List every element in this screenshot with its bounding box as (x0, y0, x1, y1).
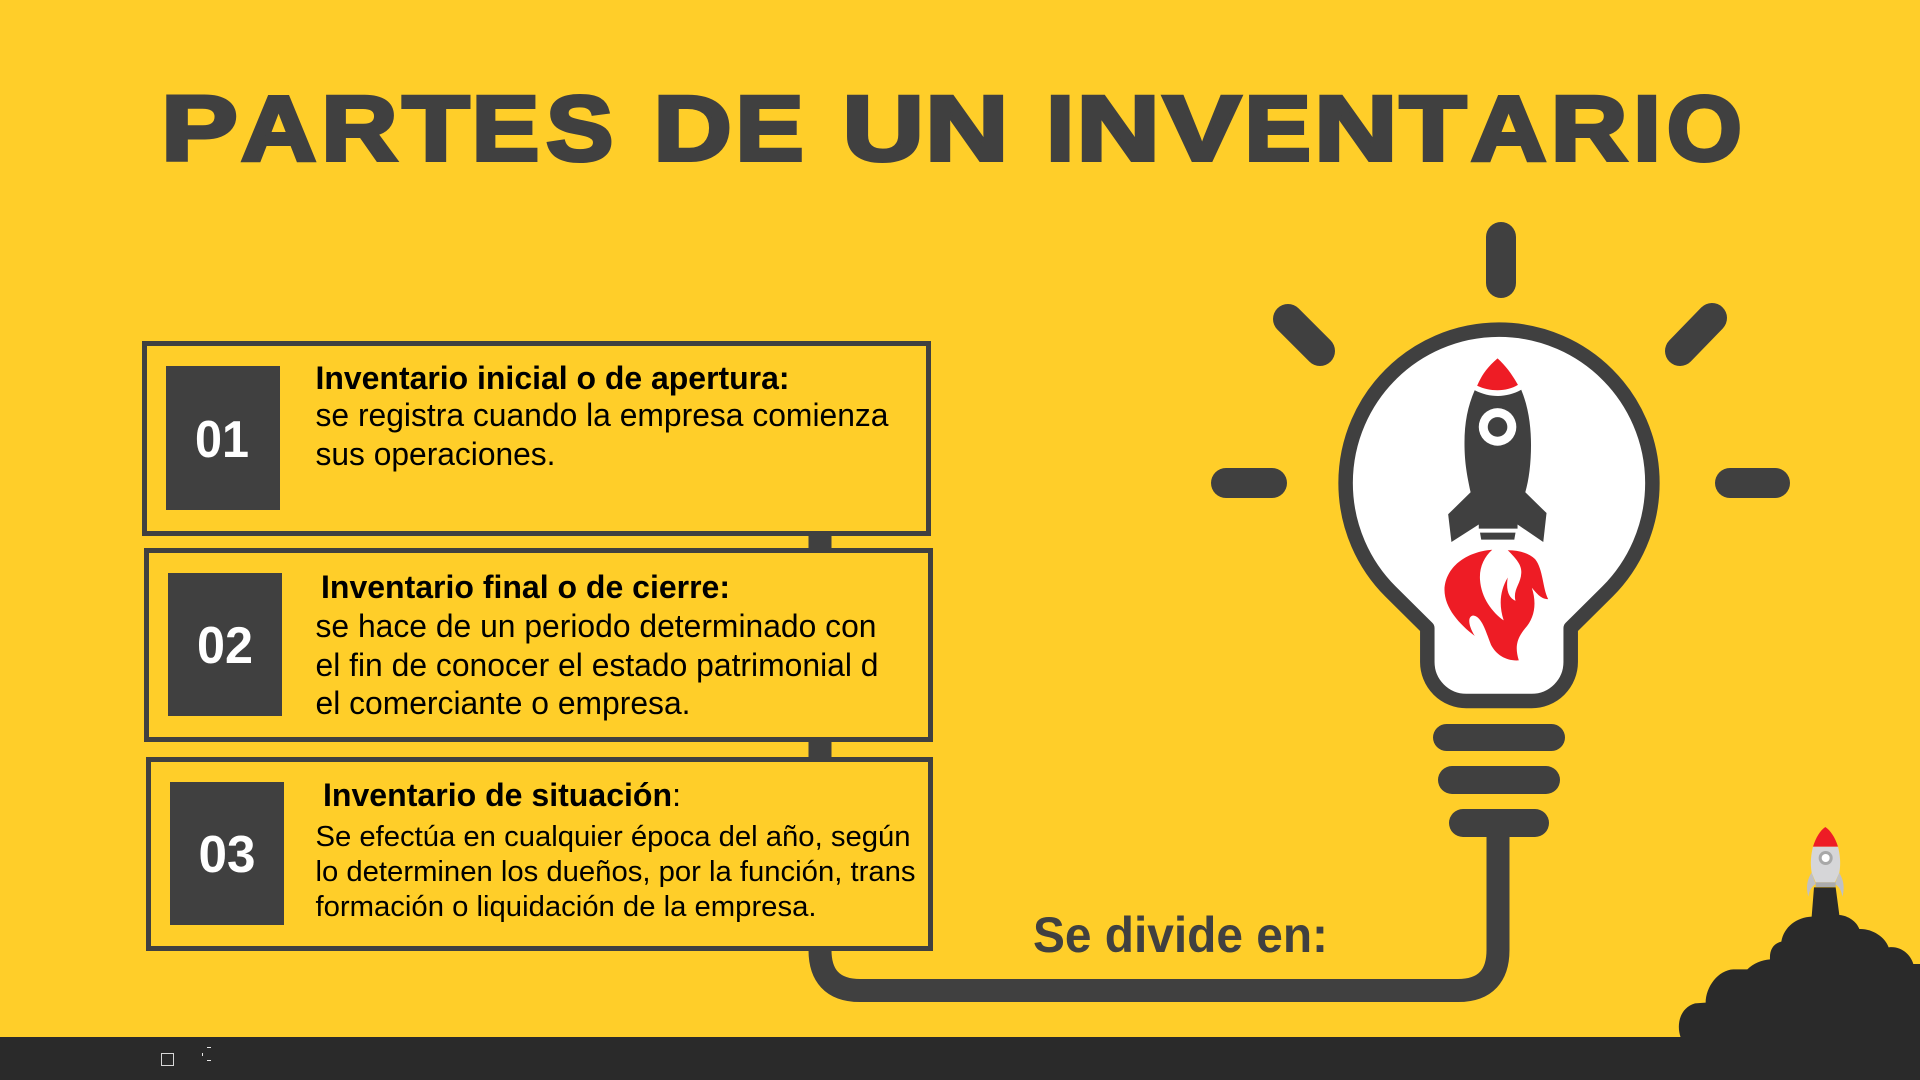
icon: light bulb (1346, 330, 1652, 837)
number badge 03: 03 (198, 826, 256, 884)
text: inventario de situacion: lo determinen los dueños, por la función, trans (316, 856, 916, 888)
title: T (1400, 78, 1466, 180)
text: inventario inicial: se registra cuando la empresa comienza (316, 397, 889, 433)
text: inventario de situacion: Se efectúa en cualquier época del año, según (316, 821, 910, 853)
panel: item 02 (146, 550, 930, 740)
text: inventario final: el fin de conocer el estado patrimonial d (316, 647, 878, 683)
icon: smoke cloud and small rocket (1640, 827, 1920, 1080)
title: A (1471, 78, 1546, 180)
title: A (241, 78, 316, 180)
title: R (321, 78, 397, 180)
title: N (1077, 78, 1160, 180)
text: inventario final: el comerciante o empresa. (316, 685, 690, 721)
number badge 01: 01 (195, 411, 249, 469)
text: inventario inicial: Inventario inicial o de apertura: (316, 360, 790, 396)
text: inventario inicial: sus operaciones. (316, 436, 556, 472)
text: inventario final: Inventario final o de cierre: (321, 569, 730, 605)
title: E (736, 78, 804, 180)
icon: light rays (1226, 237, 1775, 483)
text: inventario de situacion: Inventario de situación: (323, 777, 681, 813)
text: inventario inicial (316, 360, 889, 472)
title: E (1245, 78, 1311, 180)
title: O (1667, 78, 1742, 180)
small marks on bottom bar (69, 1035, 260, 1066)
title: N (1314, 78, 1397, 180)
panel: item 01 (144, 344, 928, 534)
number badge 01 (166, 366, 280, 510)
title: R (1551, 78, 1627, 180)
title: P (161, 78, 238, 180)
title: N (925, 78, 1008, 180)
title: D (654, 78, 732, 180)
text: inventario de situacion (316, 777, 916, 923)
text: inventario final (316, 569, 878, 721)
number badge 03 (170, 782, 284, 925)
title: I (1046, 78, 1074, 180)
title: V (1163, 78, 1241, 180)
rocket flame (1444, 550, 1548, 660)
title: T (402, 78, 469, 180)
bottom bar (0, 1037, 1920, 1080)
bulb base bars (1433, 724, 1565, 837)
text: inventario de situacion: formación o liquidación de la empresa. (316, 891, 816, 923)
title: I (1634, 78, 1660, 180)
title: U (843, 78, 924, 180)
number badge 02: 02 (197, 617, 253, 675)
icon: rocket inside bulb (1444, 358, 1548, 660)
title: S (546, 78, 613, 180)
panel: item 03 (148, 760, 930, 948)
number badge 02 (168, 573, 282, 716)
title: E (472, 78, 539, 180)
heading: se divide en: Se divide en: (1033, 907, 1328, 963)
connector wire from boxes to bulb (820, 536, 1498, 990)
text: inventario final: se hace de un periodo determinado con (316, 608, 876, 644)
